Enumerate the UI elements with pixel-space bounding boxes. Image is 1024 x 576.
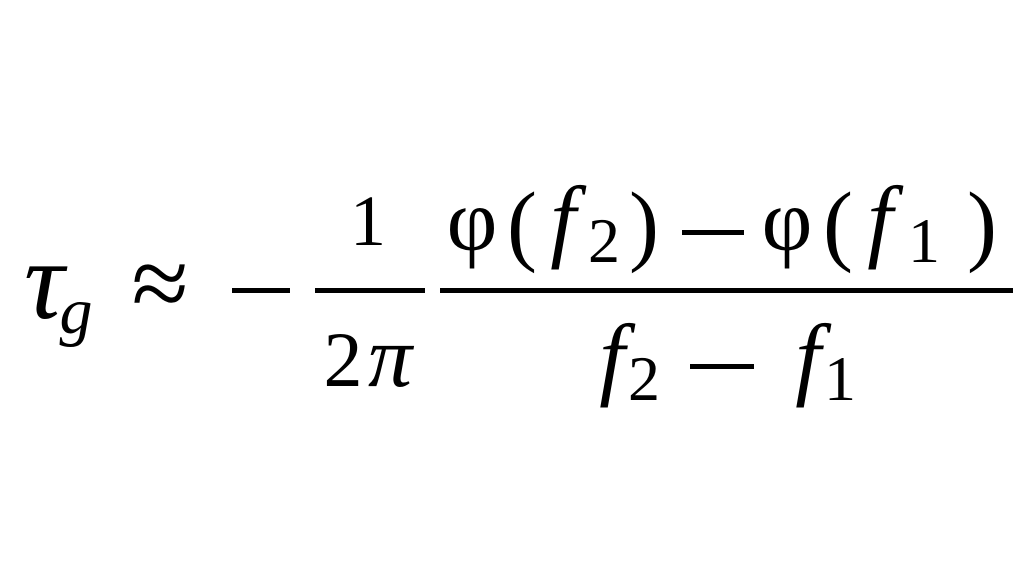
fraction: phase difference over frequency difference: f [795, 306, 832, 408]
symbol: approximately equal: ≈ [131, 226, 189, 341]
fraction: 1 over 2 pi [315, 181, 425, 406]
symbol: tau sub g: g [60, 275, 92, 348]
fraction: phase difference over frequency difference [440, 168, 1013, 414]
fraction: phase difference over frequency difference: ) [629, 175, 659, 274]
fraction: phase difference over frequency difference: φ [447, 173, 497, 270]
fraction: phase difference over frequency difference: 2 [588, 205, 620, 276]
fraction: phase difference over frequency difference: f [550, 168, 587, 270]
fraction: phase difference over frequency difference: f [867, 168, 904, 270]
fraction: phase difference over frequency difference: ( [823, 175, 853, 274]
fraction: 1 over 2 pi: π [368, 309, 415, 406]
fraction: phase difference over frequency difference: 2 [628, 343, 660, 414]
fraction: phase difference over frequency difference: ( [507, 175, 537, 274]
fraction: 1 over 2 pi: 1 [350, 181, 386, 261]
symbol: tau sub g: τ [24, 219, 68, 343]
fraction: phase difference over frequency difference: φ [762, 173, 812, 270]
fraction: phase difference over frequency difference: 1 [824, 343, 856, 414]
symbol: minus sign [232, 288, 290, 293]
fraction: phase difference over frequency difference: 1 [908, 205, 940, 276]
fraction: 1 over 2 pi: 2 [324, 316, 362, 403]
fraction: phase difference over frequency difference: f [599, 306, 636, 408]
symbol: tau sub g [24, 219, 92, 348]
fraction: phase difference over frequency difference: ) [967, 175, 997, 274]
